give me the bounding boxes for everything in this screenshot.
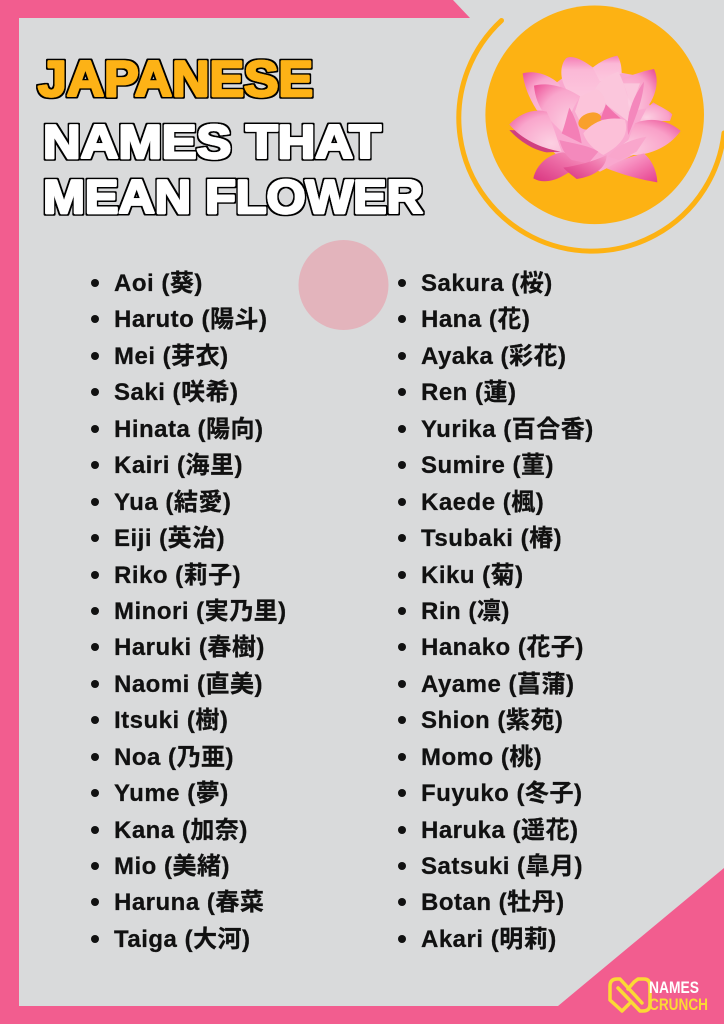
orange arc ring <box>459 20 724 251</box>
logo: NamesCrunch <box>610 979 708 1014</box>
name list: right column: Sumire (菫) <box>421 452 554 479</box>
name list: left column: Eiji (英治) <box>114 525 225 552</box>
name list: left column: Yua (結愛) <box>114 489 231 516</box>
name list: left column: Kana (加奈) <box>114 817 248 844</box>
name list: right column: Satsuki (皐月) <box>421 853 583 880</box>
name list: right column: Kaede (楓) <box>421 489 544 516</box>
name list: right column: Momo (桃) <box>421 744 542 771</box>
name list: right column: Yurika (百合香) <box>421 416 594 443</box>
name list: right column: Haruka (遥花) <box>421 817 579 844</box>
name list: right column <box>398 270 594 953</box>
name list: left column: Mei (芽衣) <box>114 343 229 370</box>
name list: left column: Haruto (陽斗) <box>114 306 267 333</box>
name list: right column: Tsubaki (椿) <box>421 525 562 552</box>
name list: right column: Rin (凛) <box>421 598 510 625</box>
name list: right column: Kiku (菊) <box>421 562 524 588</box>
name list: left column: Itsuki (樹) <box>114 707 228 734</box>
logo icon: yellow N mark <box>610 979 650 1011</box>
logo text: Crunch: CRUNCH <box>649 996 708 1014</box>
name list: right column: Ayaka (彩花) <box>421 343 566 370</box>
orange circle badge <box>485 6 704 224</box>
name list: right column: Sakura (桜) <box>421 270 553 297</box>
name list: left column: Haruna (春菜 <box>114 889 264 916</box>
name list: right column: Ren (蓮) <box>421 379 516 406</box>
name list: right column: Botan (牡丹) <box>421 889 565 916</box>
name list: right column: Hanako (花子) <box>421 634 584 661</box>
name list: left column: Hinata (陽向) <box>114 416 264 443</box>
name list: right column: Ayame (菖蒲) <box>421 671 574 698</box>
name list: right column: Hana (花) <box>421 306 530 333</box>
name list: right column: Shion (紫苑) <box>421 707 563 734</box>
name list: left column: Noa (乃亜) <box>114 744 234 771</box>
name list: right column: Akari (明莉) <box>421 926 557 953</box>
title: Japanese: JAPANESE <box>38 51 313 107</box>
name list: left column: Taiga (大河) <box>114 926 251 953</box>
title: Names That: NAMES THAT <box>43 116 381 169</box>
name list: left column: Minori (実乃里) <box>114 598 287 625</box>
name list: left column: Kairi (海里) <box>114 452 243 479</box>
icon: pink lotus flower <box>509 56 681 182</box>
name list: left column: Yume (夢) <box>114 780 229 807</box>
logo text: Names: NAMES <box>649 979 699 997</box>
name list: left column: Mio (美緒) <box>114 853 230 880</box>
name list: left column <box>91 270 287 953</box>
pale pink decorative circle <box>298 240 388 330</box>
name list: left column: Naomi (直美) <box>114 671 263 698</box>
name list: left column: Aoi (葵) <box>114 270 203 297</box>
name list: left column: Riko (莉子) <box>114 562 241 588</box>
name list: left column: Saki (咲希) <box>114 379 239 406</box>
name list: left column: Haruki (春樹) <box>114 634 265 661</box>
title: Mean Flower: MEAN FLOWER <box>43 171 423 224</box>
name list: right column: Fuyuko (冬子) <box>421 780 582 807</box>
